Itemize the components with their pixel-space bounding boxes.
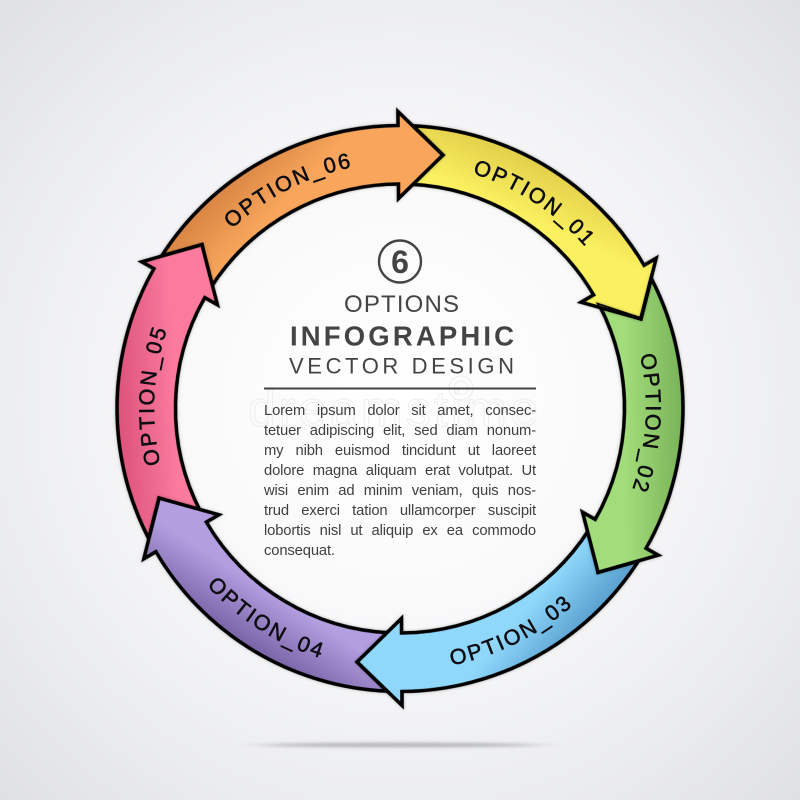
arrow: option 02 (green) (579, 273, 686, 576)
arrow: option 03 (blue) (354, 530, 642, 710)
body text: Lorem ipsum dolor sit amet, consec- (264, 403, 536, 419)
heading: OPTIONS: OPTIONS (344, 291, 459, 318)
arrow: option 04 (purple) (140, 494, 388, 695)
body text: lobortis nisl ut aliquip ex ea commodo (264, 523, 536, 539)
heading: VECTOR DESIGN: VECTOR DESIGN (289, 354, 514, 378)
body text: trud exerci tation ullamcorper suscipit (264, 503, 536, 519)
arrow: option 05 (pink) (114, 242, 221, 541)
label: OPTION_06: OPTION_06 (225, 154, 350, 226)
label: OPTION_03: OPTION_03 (450, 596, 570, 664)
arrow: option 06 (orange) (158, 107, 446, 287)
body text: consequat. (264, 543, 335, 559)
body text: wisi enim ad minim veniam, quis nos- (264, 483, 536, 499)
body text: tetuer adipiscing elit, sed diam nonum- (264, 423, 536, 439)
label: OPTION_01: OPTION_01 (475, 161, 594, 246)
icon: number 6 badge: 6 (391, 244, 409, 280)
label: OPTION_04: OPTION_04 (210, 578, 323, 658)
heading: INFOGRAPHIC: INFOGRAPHIC (290, 321, 514, 352)
label: OPTION_02: OPTION_02 (632, 354, 662, 492)
body text: dolore magna aliquam erat volutpat. Ut (264, 463, 536, 479)
body text: my nibh euismod tincidunt ut laoreet (264, 443, 536, 459)
icon: number 6 badge (379, 240, 421, 282)
arrow: option 01 (yellow) (412, 122, 660, 317)
body text (264, 403, 536, 559)
ground shadow (260, 743, 540, 747)
label: OPTION_05: OPTION_05 (139, 327, 166, 466)
watermark: dreamstime (248, 381, 538, 437)
